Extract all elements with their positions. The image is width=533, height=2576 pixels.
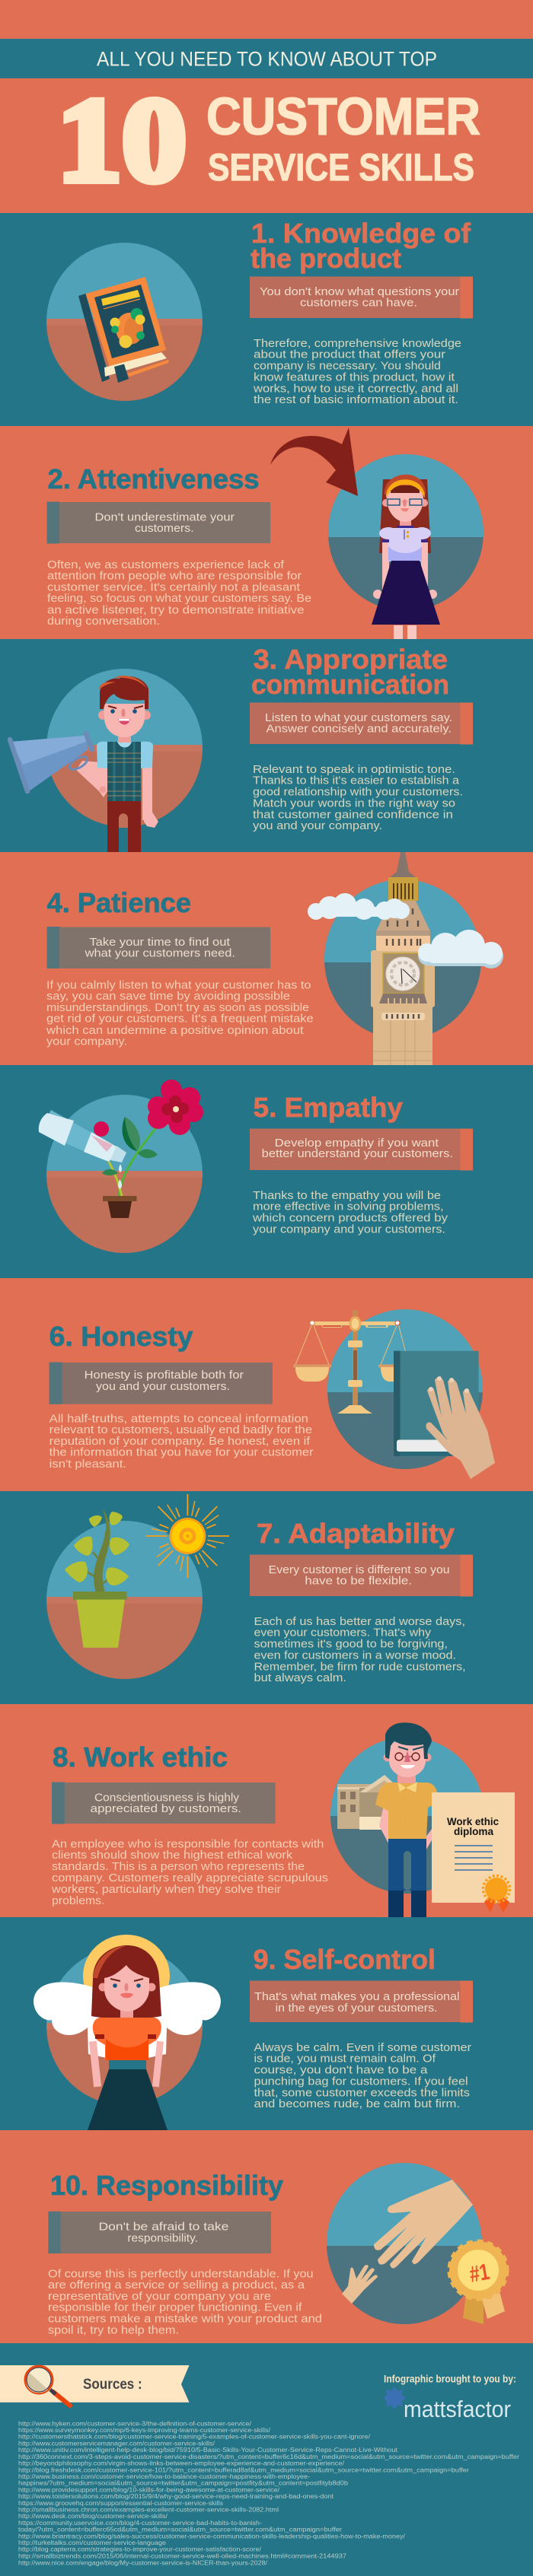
source links: http://www.business.com/customer-service/how-to-balance-customer-happiness-with-employee- <box>18 2473 310 2480</box>
title: service skills: SERVICE SKILLS <box>208 146 474 189</box>
body text: your company and your customers. <box>253 1223 445 1236</box>
callout box: in the eyes of your customers. <box>276 2002 437 2015</box>
source links: happines/?utm_medium=social&utm_source=twitter&utm_campaign=postfity&utm_content=postfityb8d0b <box>18 2480 349 2487</box>
illustration: scales <box>293 1310 409 1414</box>
illustration: clock tower <box>371 852 435 1065</box>
body text: If you calmly listen to what your customer has to <box>46 979 311 991</box>
callout box <box>52 1782 276 1824</box>
icon: seal <box>483 1876 510 1913</box>
source links: https://community.uservoice.com/blog/4-customer-service-bad-habits-to-banish- <box>18 2520 262 2527</box>
callout box: Take your time to find out <box>89 937 230 949</box>
heading: knowledge of the product <box>251 218 471 274</box>
body text: relevant to customers, usually end badly for the <box>49 1424 312 1436</box>
source links <box>18 2420 519 2566</box>
illustration circle background <box>327 454 485 613</box>
callout box <box>250 1981 473 2022</box>
body text: Each of us has better and worse days, <box>254 1616 465 1628</box>
panel: footer <box>0 2365 519 2566</box>
body text: representative of your company you are <box>48 2291 271 2303</box>
illustration circle background <box>327 1309 484 1470</box>
body text: which concern products offered by <box>252 1213 448 1225</box>
body text: workers, particularly when they solve their <box>51 1884 281 1896</box>
body text <box>252 1190 448 1236</box>
body text <box>49 1413 314 1471</box>
logo: mattsfactor: mattsfactor <box>404 2396 511 2422</box>
illustration: small hand <box>342 2265 378 2304</box>
source links: http://blog.freshdesk.com/customer-service-101/?utm_content=bufferad8af&utm_medium=social&utm_source=twitter.com&utm_campaign=buffer <box>18 2466 469 2473</box>
callout box <box>250 277 473 318</box>
callout box: Don't underestimate your <box>94 512 235 524</box>
illustration: potted plant <box>65 1509 129 1648</box>
heading: patience: 4. Patience <box>47 887 191 918</box>
source links: https://www.groovehq.com/support/essential-customer-service-skills <box>18 2500 223 2507</box>
source links: http://smallbusiness.chron.com/examples-excellent-customer-service-skills-2082.html <box>18 2506 279 2514</box>
arrow <box>270 428 358 496</box>
illustration: man with diploma <box>375 1722 437 1917</box>
icon: book <box>78 277 169 383</box>
source links: today/?utm_content=bufferc65cd&utm_medium=social&utm_source=twitter.com&utm_campaign=buffer <box>18 2527 342 2533</box>
body text: more effective in solving problems, <box>253 1201 444 1213</box>
callout box: Don't be afraid to take <box>99 2221 228 2234</box>
body text: isn't pleasant. <box>49 1458 126 1471</box>
body text: company. Customers really appreciate scrupulous <box>52 1872 328 1884</box>
icon: sun <box>145 1493 231 1579</box>
callout box <box>250 1555 473 1596</box>
body text: are offering a service or selling a product, as a <box>48 2279 305 2291</box>
callout box: customers. <box>135 523 193 535</box>
source links: https://www.surveymonkey.com/mp/6-keys-improving-teams-customer-service-skills/ <box>18 2427 271 2434</box>
callout box: better understand your customers. <box>262 1148 453 1160</box>
body text: the information that you have for your customer <box>49 1447 314 1459</box>
body text: is rude, you must remain calm. Of <box>254 2053 436 2066</box>
body text: that, some customer exceeds the limits <box>254 2087 470 2099</box>
body text: course, you don't have to be a <box>254 2065 429 2077</box>
heading: appropriate communication: communication <box>251 669 449 700</box>
body text <box>47 559 311 628</box>
illustration circle background <box>46 1521 204 1680</box>
panel: 5 empathy <box>38 1080 473 1253</box>
body text <box>46 979 314 1048</box>
illustration: cloud left <box>308 893 410 920</box>
callout box: have to be flexible. <box>305 1575 412 1587</box>
callout box: customers can have. <box>300 297 417 309</box>
illustration circle background <box>46 243 204 402</box>
panel: 7 adaptability <box>46 1494 473 1684</box>
credit line: Infographic brought to you by: <box>384 2374 516 2385</box>
body text <box>253 338 461 406</box>
source links: http://www.customerservicemanager.com/customer-service-skills/ <box>18 2440 215 2447</box>
callout box: That's what makes you a professional <box>254 1991 460 2003</box>
body text: punching bag for customers. If you feel <box>254 2075 468 2088</box>
body text: get rid of your customers. It's a frequent mistake <box>46 1013 314 1026</box>
body text: spoil it, try to help them. <box>48 2325 179 2337</box>
body text: your company. <box>46 1036 127 1048</box>
illustration: watered flower <box>39 1080 203 1218</box>
body text: Often, we as customers experience lack of <box>47 559 285 571</box>
panel: 9 self-control <box>34 1935 473 2130</box>
illustration: woman with halo and wings <box>34 1935 221 2130</box>
source links: http://www.briantracy.com/blog/sales-success/customer-service-communication-skills-leadership-qualities-how-to-make-money/ <box>18 2533 406 2539</box>
heading: honesty: 6. Honesty <box>49 1321 193 1352</box>
body text: misunderstandings. Don't try as soon as possible <box>46 1002 309 1014</box>
body text: Relevant to speak in optimistic tone. <box>253 764 455 776</box>
source links: http://blog.capterra.com/strategies-to-improve-your-customer-satisfaction-score/ <box>18 2546 262 2553</box>
body text: Therefore, comprehensive knowledge <box>254 338 461 350</box>
body text: during conversation. <box>47 615 160 628</box>
body text: an active listener, try to demonstrate initiative <box>47 604 305 616</box>
body text: feeling, so focus on what your customers say. Be <box>47 593 311 605</box>
illustration circle background <box>46 1955 203 2101</box>
source links: http://360connext.com/3-steps-avoid-customer-service-disasters/?utm_content=buffer6c16d&utm_medium=social&utm_source=twitter.com&utm_campaign=buffer <box>18 2454 519 2460</box>
callout box: what your customers need. <box>84 948 235 960</box>
heading: self-control: 9. Self-control <box>254 1944 436 1975</box>
body text: company is necessary. You should <box>254 361 441 373</box>
callout box <box>250 703 473 744</box>
illustration circle background <box>324 879 482 1040</box>
body text: but always calm. <box>254 1672 346 1684</box>
icon: magnifying glass <box>25 2366 70 2406</box>
body text: the rest of basic information about it. <box>254 394 458 406</box>
illustration circle background <box>46 1095 204 1254</box>
callout box: you and your customers. <box>96 1381 230 1393</box>
callout box <box>250 1129 473 1170</box>
panel: 10 responsibility <box>0 2130 533 2343</box>
body text: reputation of your company. Be honest, even if <box>49 1436 311 1448</box>
body text: customers make a mistake with your product and <box>48 2314 322 2326</box>
panel: 3 appropriate communication <box>8 648 473 852</box>
body text: sometimes it's good to be forgiving, <box>254 1639 448 1651</box>
body text: customer service. It's certainly not a pleasant <box>47 581 300 593</box>
heading: work ethic: 8. Work ethic <box>53 1741 228 1773</box>
body text: you and your company. <box>253 820 382 832</box>
source links: http://www.toistersolutions.com/blog/2015/9/4/why-good-service-reps-need-training-and-bad-ones-dont <box>18 2493 334 2500</box>
body text: Remember, be firm for rude customers, <box>254 1661 466 1673</box>
body text: responsible for their proper functioning. Even if <box>48 2302 302 2314</box>
illustration: big hand <box>374 2180 473 2269</box>
callout box: Answer concisely and accurately. <box>266 723 452 735</box>
logo: star <box>383 2387 406 2409</box>
illustration: boy with megaphone <box>10 676 158 852</box>
heading: knowledge of the product: 1. Knowledge of <box>251 218 471 249</box>
callout box: appreciated by customers. <box>91 1803 241 1815</box>
callout box <box>49 1362 273 1404</box>
panel: 8 work ethic <box>0 1704 533 1917</box>
source links: http://smallbiztrends.com/2015/06/internal-customer-service-well-oiled-machines.html#comment-2144937 <box>18 2553 347 2559</box>
diploma title: Work ethic <box>447 1815 499 1827</box>
sources label: Sources : <box>83 2377 142 2393</box>
body text: All half-truths, attempts to conceal information <box>49 1413 308 1425</box>
badge text: #1 <box>468 2260 491 2288</box>
callout box <box>47 927 270 968</box>
callout box: Listen to what your customers say. <box>265 712 452 724</box>
body text: Of course this is perfectly understandable. If you <box>48 2268 314 2280</box>
body text: even for customers in a worse mood. <box>254 1649 456 1662</box>
callout box: Develop empathy if you want <box>275 1137 439 1150</box>
callout box <box>47 502 270 543</box>
body text: Match your words in the right way so <box>253 797 455 809</box>
heading: appropriate communication <box>251 644 449 700</box>
heading: appropriate communication: 3. Appropriate <box>254 644 448 675</box>
source links: http://www.desk.com/blog/customer-service-skills/ <box>18 2513 168 2520</box>
heading: adaptability: 7. Adaptability <box>257 1518 455 1549</box>
heading: responsibility: 10. Responsibility <box>50 2170 283 2201</box>
icon: number one rosette <box>448 2240 508 2324</box>
title: big number 10: 10 <box>57 74 187 207</box>
callout box: Honesty is profitable both for <box>85 1369 244 1382</box>
diploma title <box>447 1815 499 1837</box>
sources banner <box>0 2365 189 2403</box>
source links: http://beyondphilosophy.com/virgin-shows-links-between-employee-experience-and-customer-experience/ <box>18 2460 345 2467</box>
callout box <box>48 2212 271 2253</box>
heading: empathy: 5. Empathy <box>254 1092 403 1123</box>
body text <box>48 2268 322 2337</box>
heading: knowledge of the product: the product <box>251 243 401 274</box>
panel: header <box>0 0 533 213</box>
source links: http://turkeltalks.com/customer-service-language <box>18 2539 167 2546</box>
illustration: diploma <box>432 1792 515 1913</box>
illustration: girl with glasses <box>372 475 440 639</box>
source links: http://www.providesupport.com/blog/10-skills-for-being-awesome-at-customer-service/ <box>18 2486 280 2493</box>
illustration: hand on book <box>394 1351 495 1479</box>
body text: problems. <box>52 1895 105 1907</box>
source links: http://customersthatstick.com/blog/customer-service-training/5-examples-of-customer-service-skills-you-cant-ignore/ <box>18 2434 371 2441</box>
body text <box>254 2042 471 2110</box>
body text <box>254 1616 466 1684</box>
body text: clients should show the highest ethical work <box>52 1849 293 1862</box>
illustration circle background <box>326 2163 483 2325</box>
illustration: cloud right <box>418 930 503 968</box>
body text: which can undermine a positive opinion about <box>46 1025 304 1037</box>
diploma title: diploma <box>454 1825 493 1837</box>
body text: say, you can save time by avoiding possible <box>46 991 290 1003</box>
body text: Always be calm. Even if some customer <box>254 2042 471 2054</box>
source links: http://www.hyken.com/customer-service-3/the-definition-of-customer-service/ <box>18 2420 252 2427</box>
source links: http://www.nice.com/engage/blog/My-customer-service-is-NICER-than-yours-2028/ <box>18 2559 268 2566</box>
body text: that customer gained confidence in <box>253 809 453 821</box>
illustration circle background <box>46 669 204 828</box>
heading: attentiveness: 2. Attentiveness <box>47 463 259 495</box>
body text: even your customers. That's why <box>254 1627 432 1639</box>
body text: good relationship with your customers. <box>253 787 463 799</box>
body text <box>51 1839 328 1907</box>
body text: about the product that offers your <box>254 349 445 361</box>
body text: works, how to use it correctly, and all <box>253 383 458 395</box>
title: customer: CUSTOMER <box>206 87 480 146</box>
body text: attention from people who are responsible for <box>47 570 302 582</box>
callout box: responsibility. <box>127 2233 198 2245</box>
callout box: Every customer is different so you <box>269 1564 450 1576</box>
panel: 4 patience <box>0 852 533 1065</box>
callout box: You don't know what questions your <box>260 286 459 298</box>
panel: 1 knowledge of the product <box>46 222 473 403</box>
body text: Thanks to the empathy you will be <box>253 1190 441 1202</box>
body text: know features of this product, how it <box>254 371 455 383</box>
body text: standards. This is a person who represents the <box>52 1861 305 1873</box>
body text <box>253 764 463 832</box>
body text: and becomes rude, be calm but firm. <box>254 2098 460 2110</box>
body text: An employee who is responsible for contacts with <box>52 1839 324 1851</box>
illustration: building <box>337 1775 404 1830</box>
panel: 2 attentiveness <box>0 426 533 639</box>
callout box: Conscientiousness is highly <box>94 1792 240 1805</box>
panel: 6 honesty <box>0 1278 533 1491</box>
illustration circle background <box>330 1737 486 1894</box>
body text: Thanks to this it's easier to establish a <box>253 775 460 787</box>
source links: http://www.unitiv.com/intelligent-help-desk-blog/bid/75910/5-Basic-Skills-Your-Customer-Service-Reps-Cannot-Live-Without <box>18 2447 398 2454</box>
title: intro line: ALL YOU NEED TO KNOW ABOUT TOP <box>97 47 437 70</box>
